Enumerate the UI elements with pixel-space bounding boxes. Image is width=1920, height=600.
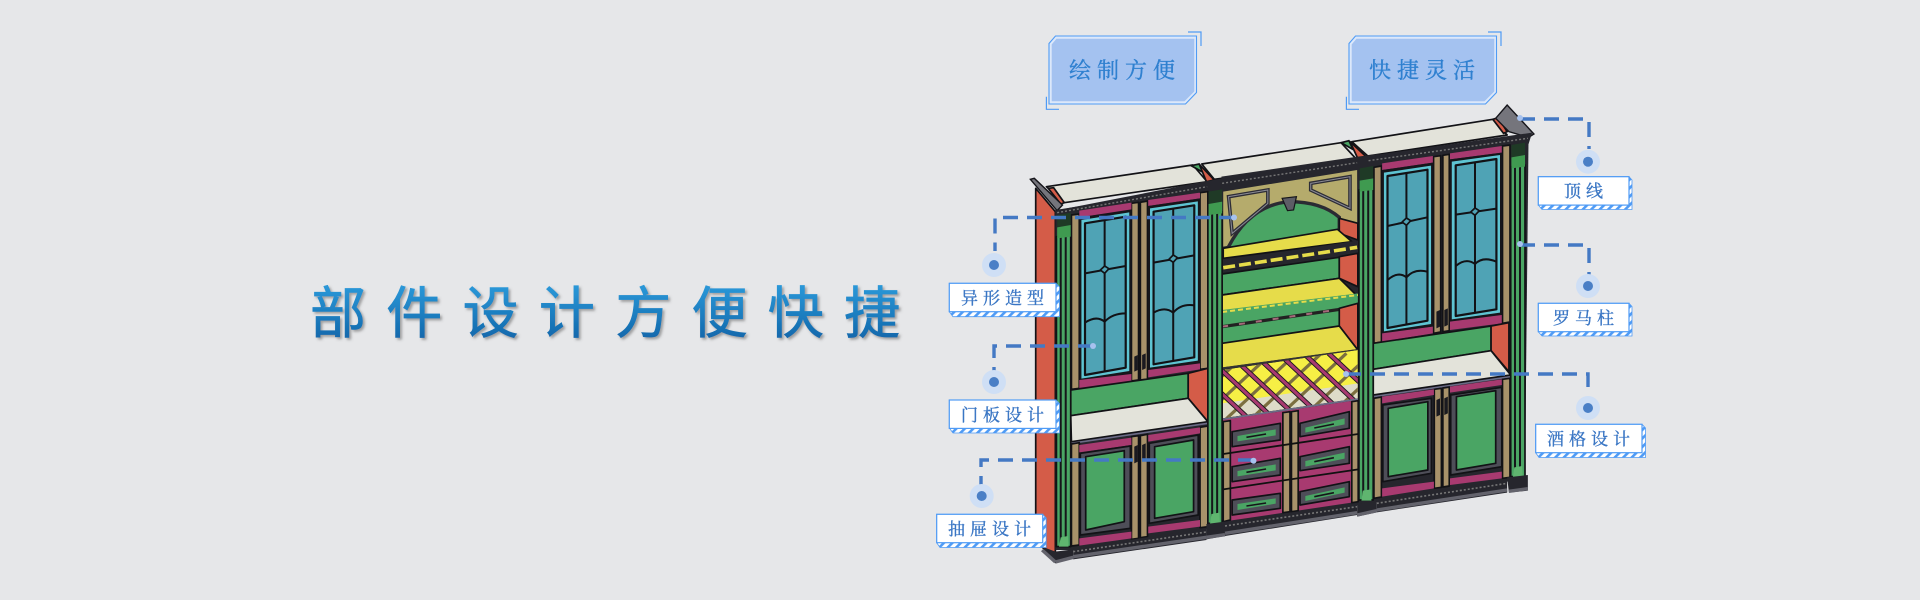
roman columns xyxy=(1056,143,1525,547)
glass door left xyxy=(1382,163,1433,334)
cabinet illustration xyxy=(1030,105,1534,563)
door handles xyxy=(1436,308,1448,417)
callout: 酒格设计: 酒格设计 xyxy=(1547,430,1635,449)
callout: 顶线: 顶线 xyxy=(1564,182,1608,201)
middle bay xyxy=(1223,170,1359,522)
glass door right xyxy=(1450,153,1502,322)
cabinet left side panel xyxy=(1036,188,1055,560)
callout: 异形造型: 异形造型 xyxy=(961,289,1049,308)
callout: 异形造型 xyxy=(949,214,1237,317)
left bay xyxy=(1071,192,1208,546)
lower door left xyxy=(1383,398,1431,482)
callout: 门板设计: 门板设计 xyxy=(961,406,1049,425)
callout: 抽屉设计 xyxy=(937,458,1256,548)
tag: 绘制方便: 绘制方便 xyxy=(1069,58,1181,83)
right bay xyxy=(1373,145,1511,498)
callout: 顶线 xyxy=(1517,115,1632,210)
lower door left xyxy=(1080,446,1130,535)
callout: 罗马柱: 罗马柱 xyxy=(1553,309,1619,328)
drawers xyxy=(1223,400,1358,522)
callout: 抽屉设计: 抽屉设计 xyxy=(948,520,1036,539)
carved corner panels xyxy=(1229,177,1350,233)
column base leaves xyxy=(1059,466,1523,547)
crown end pieces xyxy=(1030,105,1534,211)
heading: 部件设计方便快捷 xyxy=(310,282,920,345)
tag: 快捷灵活: 快捷灵活 xyxy=(1369,58,1481,83)
callout: 罗马柱 xyxy=(1517,241,1632,336)
tag: 快捷灵活 xyxy=(1346,32,1501,109)
lower door right xyxy=(1451,387,1502,475)
wine lattice xyxy=(1223,350,1358,418)
cabinet top surface xyxy=(1046,118,1507,204)
cornice xyxy=(1055,133,1532,217)
door handles xyxy=(1134,353,1146,463)
callout: 酒格设计 xyxy=(1343,371,1646,458)
cabinet body base xyxy=(1055,135,1529,550)
arch xyxy=(1229,202,1339,252)
callout: 门板设计 xyxy=(949,343,1096,433)
urn ornament xyxy=(1282,197,1296,211)
column capitals xyxy=(1057,143,1525,238)
tag: 绘制方便 xyxy=(1046,32,1201,109)
glass door left xyxy=(1079,209,1131,382)
lower door right xyxy=(1149,435,1198,523)
glass door right xyxy=(1148,198,1200,371)
rail xyxy=(1222,241,1358,273)
plinth xyxy=(1042,475,1528,563)
